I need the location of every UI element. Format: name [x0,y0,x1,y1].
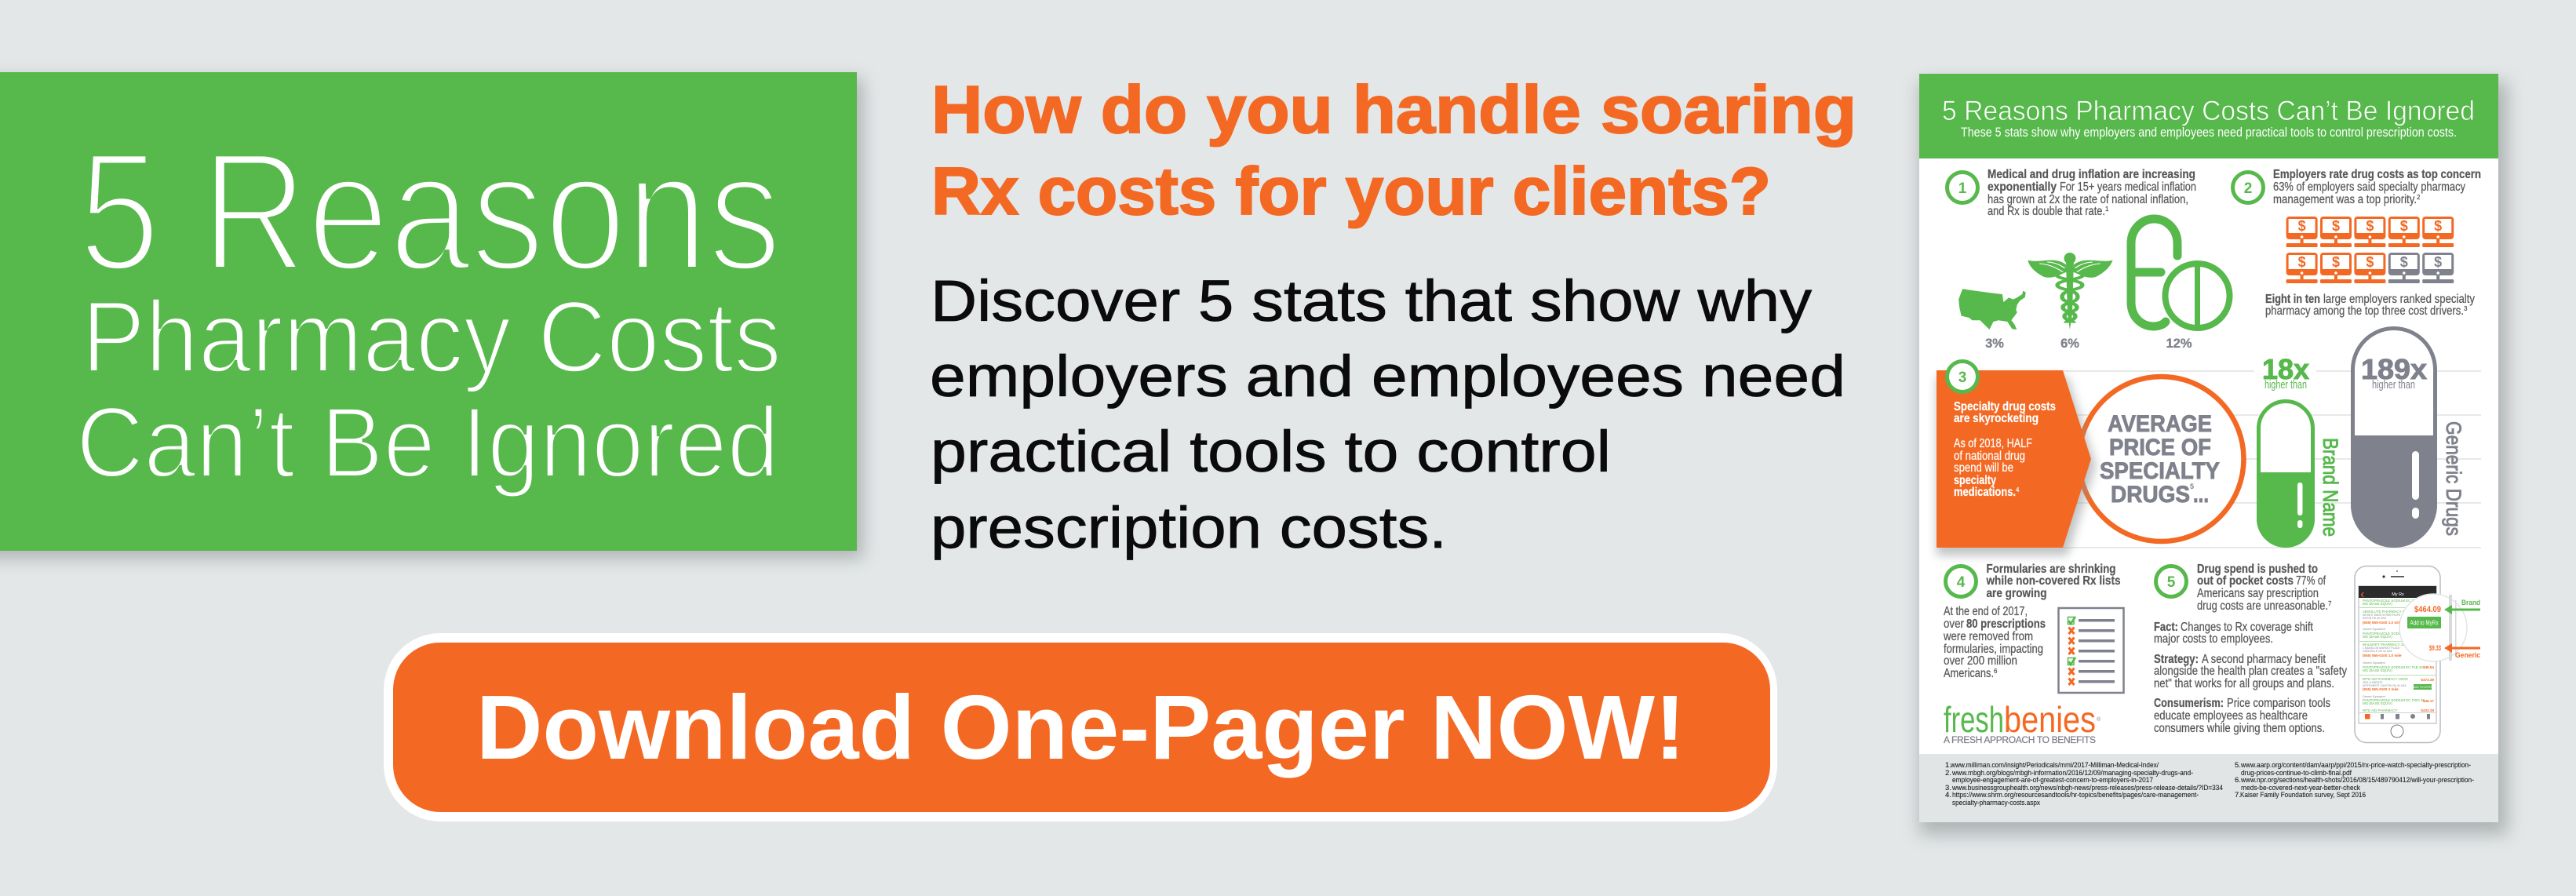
prescription price list: MG (BASE EQUIV) [2363,635,2392,639]
percentage labels: 6% [2060,337,2079,351]
reason 5 text [2154,563,2347,735]
icon group: 10 monitors, 8 orange and 2 gray [2286,217,2454,283]
prescription price list: (555) 555-0100 1.0 mile [2363,654,2402,657]
reason 5 text: Drug spend is pushed to [2197,563,2318,576]
prescription price list: PANTOPRAZOLE SODIUM EC TWO 40 [2363,698,2425,702]
icon group: 10 monitors, 8 orange and 2 gray: $ [2298,254,2306,270]
logo: freshbenies: benies [2004,699,2096,740]
prescription price list: 3521 N ARENTE [2363,681,2383,684]
prescription price list: ADD TO MYRX [2413,686,2433,689]
icon group: 10 monitors, 8 orange and 2 gray: $ [2332,218,2340,234]
icon group: 10 monitors, 8 orange and 2 gray: $ [2400,218,2408,234]
generic drugs pill chart: Generic Drugs [2442,421,2465,536]
prescription price list: 1 MASSILON MARKET PLACE [2363,647,2400,650]
reason 4 text: At the end of 2017, [1944,605,2028,618]
logo: freshbenies: ® [2097,716,2101,723]
prescription price list: Generic Equivalent [2363,628,2385,631]
panel: green title banner [0,72,863,559]
footer references: 1. [1945,761,1951,770]
reason 1 text [1988,168,2196,218]
consumerism: consumers while giving them options. [2154,722,2325,735]
reason 4 text: while non-covered Rx lists [1986,574,2120,588]
panel: reason 3 orange arrow [1937,361,2096,555]
brand name pill chart: 18x [2262,353,2310,385]
body paragraph: employers and employees need [930,344,1845,409]
footer references [1919,754,2498,822]
reason 4 text: over 200 million [1944,654,2017,668]
prescription price list: $49.17 [2423,699,2434,703]
reason 2 badge: 2 [2244,180,2252,197]
strategy [2154,653,2347,690]
prescription price list: NORTHWEST CANTON OH 44 USA [2363,684,2407,687]
reason 5 text: 7 [2328,600,2332,607]
eight in ten text: Eight in ten [2265,293,2320,306]
icon group: 10 monitors, 8 orange and 2 gray: $ [2400,254,2408,270]
reason 2 badge [2233,173,2263,202]
icon: checklist [2059,608,2123,693]
footer references: specialty-pharmacy-costs.aspx [1952,799,2040,807]
reason 3 text: are skyrocketing [1954,412,2039,425]
arrow: brand price: Brand [2461,599,2480,607]
reason 3 text: medications. [1954,486,2016,499]
headline question: How do you handle soaring [931,73,1856,148]
prescription price list: Generic Equivalent [2363,695,2385,698]
strategy: Strategy: [2154,653,2199,666]
fact: Fact: [2154,621,2178,634]
average price circle [2079,377,2244,541]
reason 3 text: specialty [1954,474,1996,487]
footer references: www.npr.org/sections/health-shots/2016/08/15/489790412/will-your-prescription- [2240,776,2474,785]
reason 4 badge: 4 [1957,574,1966,591]
fact: major costs to employees. [2154,632,2273,646]
prescription price list: RITE AID PHARMACY 10913 [2363,677,2408,681]
icon: caduceus [2028,253,2113,330]
phone tab bar [2359,712,2436,719]
brand name pill chart: higher than [2264,379,2307,392]
headline question [931,73,1856,229]
reason 5 text: drug costs are unreasonable. [2197,599,2328,613]
prescription price list: $49.54 [2423,665,2434,669]
reason 3 text [1954,400,2056,499]
strategy: net" that works for all groups and plans. [2154,677,2334,690]
footer references: drug-prices-continue-to-climb-final.pdf [2241,769,2352,778]
reason 3 badge: 3 [1958,370,1966,386]
icon: capsule and tablet [2131,219,2230,328]
body paragraph: prescription costs. [931,495,1447,560]
footer references: meds-be-covered-next-year-better-check [2241,784,2360,792]
prescription price list: EATON RD 40 USA [2363,617,2387,620]
icon group: 10 monitors, 8 orange and 2 gray: $ [2332,254,2340,270]
reason 5 badge [2156,566,2186,596]
generic drugs pill chart [2351,328,2465,548]
one-pager header: These 5 stats show why employers and employees need practical tools to control prescription costs. [1961,126,2457,140]
one-pager header: 5 Reasons Pharmacy Costs Can’t Be Ignored [1942,95,2475,126]
average price circle: 5 [2190,483,2194,490]
reason 1 text: For 15+ years medical inflation [2060,180,2196,194]
panel: one-pager preview [1919,74,2508,835]
strategy: alongside the health plan creates a "safety [2154,665,2347,678]
reason 4 text: formularies, impacting [1944,643,2043,656]
prescription price list: WHIGHT WAVE STREETHOPE [2363,614,2401,617]
footer references: 7. [2235,791,2241,799]
reason 4 badge [1946,566,1976,596]
icon: US map [1958,289,2026,330]
prescription price list: (555) 555-0100 1.0 mile [2363,621,2402,625]
icon group: 10 monitors, 8 orange and 2 gray: $ [2366,254,2374,270]
magnified price callout: $464.09 [2414,605,2441,614]
reason 1 text: exponentially [1988,180,2057,194]
footer references: www.aarp.org/content/dam/aarp/ppi/2015/rx-price-watch-specialty-prescription- [2240,761,2471,770]
reason 4 text: Formularies are shrinking [1987,563,2115,576]
reason 3 text: of national drug [1954,450,2025,463]
body paragraph: practical tools to control [931,419,1611,484]
percentage labels: 3% [1985,337,2004,351]
reason 2 text [2273,168,2481,206]
arrow: generic price [2444,643,2480,660]
footer references: 4. [1945,791,1951,799]
prescription price list: MG (BASE EQUIV) [2363,602,2392,606]
reason 4 text: 80 prescriptions [1966,617,2046,631]
prescription price list: WALMART PHARMACY 10-0911 [2363,643,2414,647]
footer references: Kaiser Family Foundation survey, Sept 2016 [2240,791,2366,799]
strategy: A second pharmacy benefit [2202,653,2326,666]
arrow: brand price [2444,599,2480,614]
footer references: www.milliman.com/insight/Periodicals/mmi/2017-Milliman-Medical-Index/ [1950,761,2159,770]
headline question: Rx costs for your clients? [931,155,1771,229]
fact: Changes to Rx coverage shift [2181,621,2314,634]
average price circle: ... [2193,482,2209,508]
footer references: www.mbgh.org/blogs/mbgh-information/2016/12/09/managing-specialty-drugs-and- [1951,769,2193,778]
consumerism: Consumerism: [2154,697,2224,710]
reason 4 text: were removed from [1943,630,2033,643]
one-pager header [1919,74,2498,158]
footer references: 6. [2235,776,2241,785]
prescription price list: GRANVILLE OH 44 USA [2363,650,2392,653]
prescription price list: ABSOLUTE PHARMACY INC [2363,610,2408,614]
average price circle: DRUGS [2111,482,2190,508]
reason 5 text: out of pocket costs [2197,574,2294,588]
reason 2 text: 63% of employers said specialty pharmacy [2273,180,2465,194]
reason 1 badge [1947,173,1977,202]
reason 4 text: Americans. [1944,667,1994,680]
brand name pill chart: Brand Name [2319,438,2342,537]
heading: Can't Be Ignored: Can’t Be Ignored [76,387,779,499]
generic drugs pill chart: 189x [2361,353,2428,385]
reason 2 text: 2 [2417,194,2421,201]
footer references: https://www.shrm.org/resourcesandtools/hr-topics/benefits/pages/care-management- [1952,791,2199,799]
magnified price callout: $9.33 [2429,644,2441,652]
consumerism: Price comparison tools [2227,697,2330,710]
logo: freshbenies: fresh [1944,699,2004,740]
prescription price list: PANTOPRAZOLE SODIUM [2363,632,2405,636]
prescription price list: MG (BASE EQUIV) [2363,701,2392,705]
icon group: 10 monitors, 8 orange and 2 gray: $ [2434,218,2442,234]
average price circle: AVERAGE [2108,411,2212,437]
reason 4 text: 6 [1994,668,1998,675]
reason 3 text: As of 2018, HALF [1954,437,2032,450]
body paragraph [930,268,1845,560]
consumerism: educate employees as healthcare [2154,709,2308,723]
reason 1 badge: 1 [1958,180,1967,197]
generic drugs pill chart: higher than [2372,379,2415,392]
footer references: 3. [1945,784,1951,792]
magnified price callout [2399,594,2467,661]
footer references: 2. [1945,769,1951,778]
prescription price list [2359,599,2436,712]
prescription price list: (555) 555-0100 1 mile [2363,687,2399,691]
icon group: 10 monitors, 8 orange and 2 gray: $ [2434,254,2442,270]
phone illustration [2355,566,2480,742]
prescription price list: Generic Equivalent [2363,661,2385,665]
prescription price list: RITE AID PHARMACY [2363,708,2397,712]
reason 4 text: over [1944,617,1964,631]
prescription price list: $473.39 [2421,678,2434,682]
consumerism [2154,697,2330,735]
reason 2 text: management was a top priority. [2273,193,2417,206]
reason 2 text: Employers rate drug costs as top concern [2273,168,2481,181]
percentage labels: 12% [2166,337,2192,351]
body paragraph: Discover 5 stats that show why [931,268,1812,333]
arrow: generic price: Generic [2455,651,2480,660]
footer references: 5. [2235,761,2241,770]
reason 3 text: 4 [2016,486,2020,494]
download button: Download One-Pager NOW! [476,676,1685,778]
reason 1 text: and Rx is double that rate. [1988,205,2105,218]
eight in ten text: pharmacy among the top three cost drivers. [2265,304,2464,318]
prescription price list: PANTOPRAZOLE SODIUM EC TWO 40 [2363,599,2425,603]
reason 5 text: Americans say prescription [2197,587,2319,600]
eight in ten text: 3 [2464,305,2468,312]
reason 5 text: 77% of [2296,574,2326,588]
logo: freshbenies: A FRESH APPROACH TO BENEFITS [1944,734,2096,745]
reason 1 text: Medical and drug inflation are increasing [1988,168,2195,181]
phone illustration: My Rx [2392,592,2404,597]
average price circle: PRICE OF [2109,435,2211,461]
icon group: 10 monitors, 8 orange and 2 gray: $ [2298,218,2306,234]
eight in ten text [2265,293,2475,318]
prescription price list: $433.39 [2421,708,2434,712]
prescription price list: PANTOPRAZOLE SODIUM EC TAB 40 [2363,665,2423,669]
reason 4 text: are growing [1987,587,2046,600]
reason 1 text: has grown at 2x the rate of national inflation, [1988,193,2188,206]
reason 3 badge [1947,361,1977,392]
download button [384,633,1777,821]
reason 4 text [1943,563,2120,680]
footer references: www.businessgrouphealth.org/news/nbgh-news/press-releases/press-release-details/?ID=334 [1951,784,2223,792]
logo: freshbenies [1944,699,2101,745]
prescription price list: MG (BASE EQUIV) [2363,668,2392,672]
brand name pill chart [2257,353,2342,548]
reason 1 text: 1 [2105,206,2109,213]
magnified price callout: Add to MyRx [2410,620,2439,626]
heading: 5 Reasons: 5 Reasons [78,116,782,306]
average price circle: SPECIALTY [2100,458,2220,484]
icon group: 10 monitors, 8 orange and 2 gray: $ [2366,218,2374,234]
heading: Pharmacy Costs: Pharmacy Costs [82,279,782,394]
eight in ten text: large employers ranked specialty [2323,293,2475,306]
percentage labels [1985,337,2192,351]
reason 5 badge: 5 [2167,574,2176,591]
reason 3 text: Specialty drug costs [1954,400,2056,413]
fact [2154,621,2314,646]
footer references: employee-engagement-are-of-greatest-concern-to-employers-in-2017 [1952,776,2153,785]
reason 3 text: spend will be [1954,461,2013,475]
